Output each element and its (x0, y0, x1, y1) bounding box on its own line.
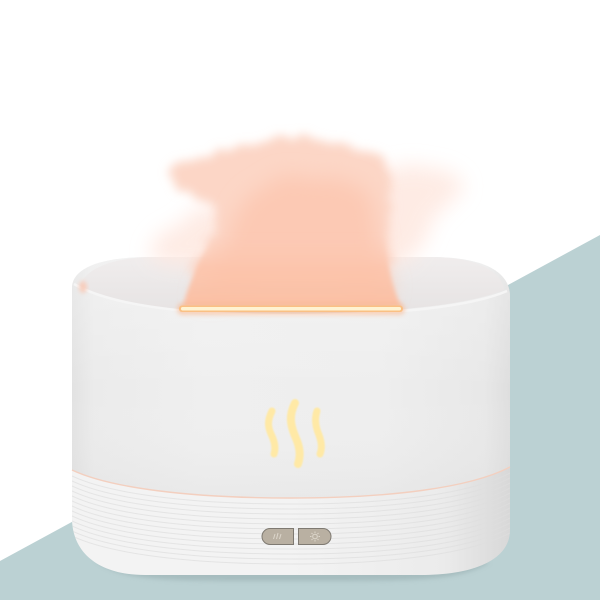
left glow spot (79, 281, 87, 293)
top well (80, 257, 504, 314)
icon: light (310, 532, 320, 542)
product illustration (0, 130, 600, 600)
faint outer mist (148, 167, 464, 264)
glowing slot (177, 303, 405, 315)
light button (298, 528, 331, 544)
mist button (262, 528, 294, 544)
icon: mist (274, 533, 281, 539)
device shadow (95, 560, 490, 581)
core mist (196, 175, 392, 296)
flame mist (148, 138, 464, 306)
flame sheet in well (183, 235, 401, 306)
peach seam line (72, 467, 510, 498)
upper mist (166, 138, 393, 276)
front lip highlight (74, 284, 507, 315)
background teal diagonal panel (0, 235, 600, 600)
control buttons (262, 528, 331, 544)
icon: three flame waves (268, 403, 321, 464)
upper housing (72, 257, 510, 500)
diffuser body (72, 257, 510, 575)
ridged base (72, 467, 510, 575)
